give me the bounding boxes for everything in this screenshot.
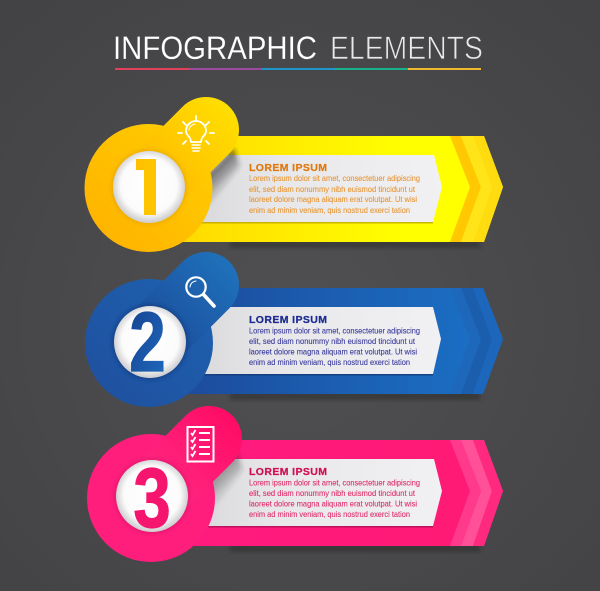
yellow arrow banner [170, 136, 503, 242]
text block: elit, sed diam nonummy nibh euismod tincidunt ut [249, 185, 416, 194]
pill [150, 285, 206, 341]
big circle [87, 434, 215, 562]
text block: LOREM IPSUM [249, 314, 327, 326]
big circle [85, 279, 213, 407]
white text panel [190, 155, 442, 222]
pill [150, 130, 206, 186]
number 1 [136, 159, 156, 215]
blue arrow banner [170, 288, 503, 394]
white text panel [190, 307, 441, 374]
icon: magnifier [186, 277, 214, 306]
text block: LOREM IPSUM [249, 466, 327, 478]
icon: checklist [188, 427, 214, 462]
pill shadow [193, 452, 243, 512]
panel: step 2 blue [85, 277, 503, 407]
arrow chevron layers [450, 288, 503, 394]
text block: elit, sed diam nonummy nibh euismod tincidunt ut [249, 337, 416, 346]
text block: enim ad minim veniam, quis nostrud exerci tation [249, 358, 410, 367]
text block: Lorem ipsum dolor sit amet, consectetuer adipiscing [249, 478, 420, 488]
number circle [114, 458, 190, 534]
text block [249, 162, 420, 215]
text block [249, 466, 420, 519]
bar shadow [230, 544, 480, 552]
number circle [112, 150, 186, 224]
number 2: 2 [129, 295, 166, 389]
icon: light bulb [178, 116, 214, 151]
text block: enim ad minim veniam, quis nostrud exerci tation [249, 510, 410, 519]
number 1: 1 [127, 143, 172, 233]
arrow chevron layers [450, 440, 503, 546]
panel edge shadow [200, 222, 433, 224]
text block: laoreet dolore magna aliquam erat volutpat. Ut wisi [249, 500, 417, 508]
rainbow divider line [115, 68, 481, 70]
text block: enim ad minim veniam, quis nostrud exerci tation [249, 206, 410, 215]
panel: step 1 yellow [84, 116, 503, 252]
panel edge shadow [200, 374, 433, 376]
white text panel [190, 459, 442, 526]
bar shadow [230, 240, 480, 248]
text block: Lorem ipsum dolor sit amet, consectetuer adipiscing [249, 326, 420, 336]
pink arrow banner [170, 440, 503, 546]
text block [249, 314, 420, 367]
text block: elit, sed diam nonummy nibh euismod tincidunt ut [249, 489, 416, 498]
big circle [84, 124, 212, 252]
number circle [112, 304, 188, 380]
pill [153, 439, 209, 495]
panel: step 3 pink [87, 427, 503, 562]
number 3: 3 [133, 452, 171, 546]
pill shadow [190, 148, 240, 208]
text block: Lorem ipsum dolor sit amet, consectetuer adipiscing [249, 174, 420, 183]
text block: LOREM IPSUM [249, 162, 327, 174]
text block: laoreet dolore magna aliquam erat volutpat. Ut wisi [249, 348, 417, 356]
bar shadow [230, 392, 480, 400]
text block: laoreet dolore magna aliquam erat volutpat. Ut wisi [249, 195, 417, 204]
title: INFOGRAPHIC [113, 30, 317, 66]
panel edge shadow [200, 526, 433, 528]
title [113, 30, 483, 66]
title: ELEMENTS [330, 30, 483, 66]
arrow chevron layers [450, 136, 503, 242]
